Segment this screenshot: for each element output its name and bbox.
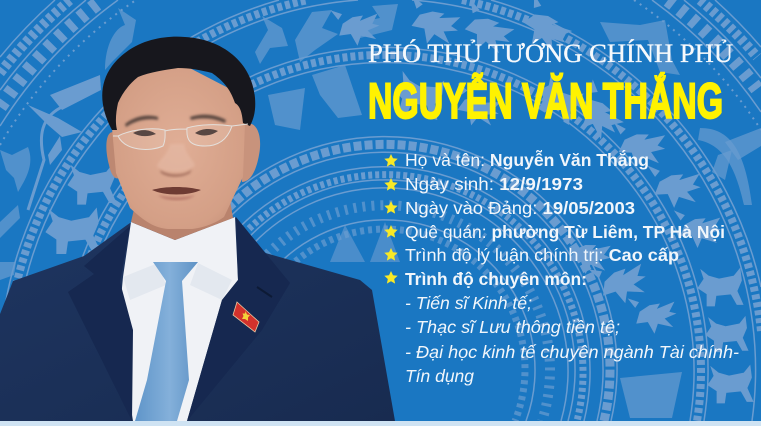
glasses xyxy=(113,124,248,149)
shirt xyxy=(118,217,238,421)
face xyxy=(112,62,245,229)
eyes xyxy=(133,129,218,136)
tie xyxy=(135,262,198,421)
nose shadow xyxy=(160,169,192,177)
neck xyxy=(131,200,233,240)
collar shadow xyxy=(123,263,232,300)
left crane xyxy=(28,75,101,210)
biography text: - Đại học kinh tế chuyên ngành Tài chính- xyxy=(405,342,739,362)
biography text: Quê quán: phường Từ Liêm, TP Hà Nội xyxy=(405,222,725,242)
mouth xyxy=(152,187,201,194)
left ear xyxy=(106,132,119,178)
eyebrows xyxy=(125,115,226,127)
right ear xyxy=(242,123,260,182)
lapel buttonhole xyxy=(257,287,272,297)
right lapel xyxy=(187,217,290,421)
biography text: Ngày vào Đảng: 19/05/2003 xyxy=(405,198,635,218)
biography text: Trình độ lý luận chính trị: Cao cấp xyxy=(405,245,679,265)
heading: office title: PHÓ THỦ TƯỚNG CHÍNH PHỦ xyxy=(368,39,733,68)
lower lip xyxy=(158,195,195,200)
biography text xyxy=(405,149,739,386)
star bullets xyxy=(384,154,398,284)
portrait photo xyxy=(0,37,395,421)
biography text: Họ và tên: Nguyễn Văn Thắng xyxy=(405,149,649,170)
suit jacket xyxy=(0,217,395,421)
biography text: Trình độ chuyên môn: xyxy=(405,269,587,289)
lapel pin xyxy=(233,302,259,332)
biography text: Tín dụng xyxy=(405,366,474,386)
sun ray sector xyxy=(330,222,400,262)
biography text: - Thạc sĩ Lưu thông tiền tệ; xyxy=(405,317,620,337)
left lapel xyxy=(68,226,133,421)
hair xyxy=(102,37,255,130)
bottom light strip xyxy=(0,421,761,426)
nose xyxy=(157,144,195,172)
biography text: Ngày sinh: 12/9/1973 xyxy=(405,174,583,194)
biography text: - Tiến sĩ Kinh tế; xyxy=(405,293,532,313)
